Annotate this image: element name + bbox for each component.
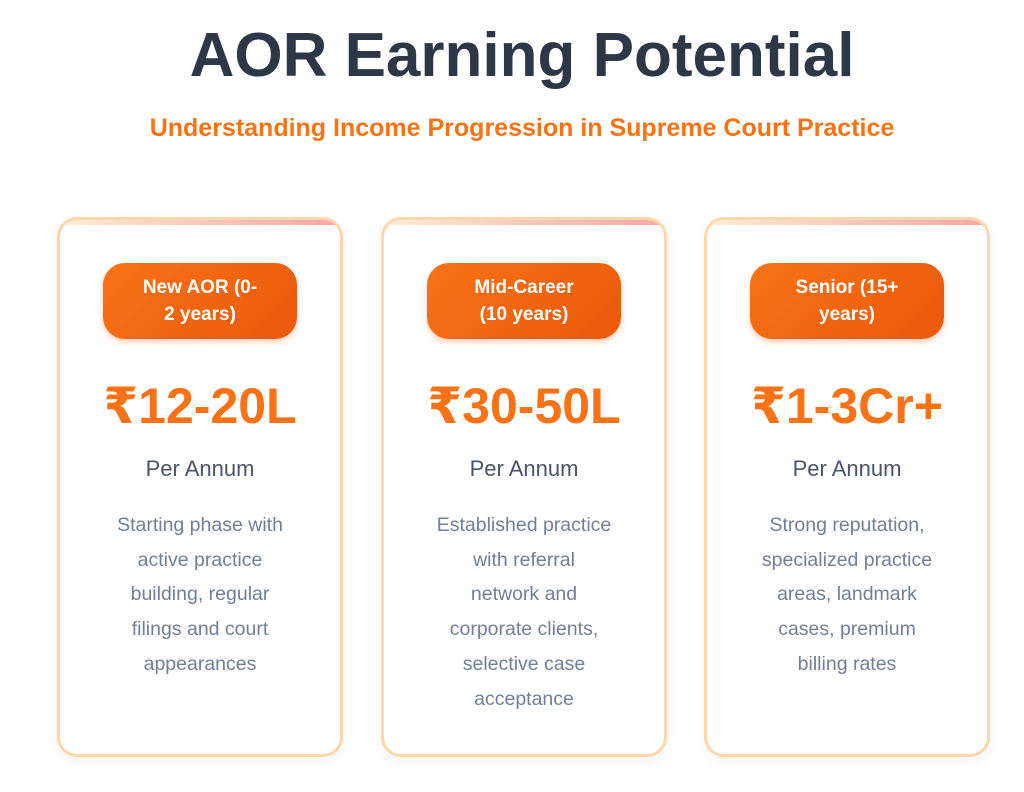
price: ₹30-50L	[427, 378, 621, 434]
panel: new AOR	[57, 217, 343, 757]
panel: senior	[704, 217, 990, 757]
badge: Mid-Career	[474, 277, 574, 298]
description: appearances	[144, 653, 256, 675]
price: ₹12-20L	[103, 378, 297, 434]
description: specialized practice	[762, 549, 932, 571]
description: cases, premium	[778, 618, 916, 640]
description	[117, 514, 283, 675]
badge: New AOR (0-	[143, 277, 257, 298]
description: Established practice	[437, 514, 611, 536]
price: ₹1-3Cr+	[751, 378, 943, 434]
badge: (10 years)	[480, 304, 568, 325]
description: filings and court	[132, 618, 268, 640]
per annum: Per Annum	[146, 456, 254, 481]
description	[762, 514, 932, 675]
description: building, regular	[131, 583, 269, 605]
badge	[103, 263, 297, 339]
badge	[427, 263, 621, 339]
subtitle: Understanding Income Progression in Supreme Court Practice	[150, 114, 894, 142]
description: acceptance	[474, 688, 574, 710]
description: areas, landmark	[777, 583, 917, 605]
description: Starting phase with	[117, 514, 283, 536]
description: with referral	[473, 549, 575, 571]
description: billing rates	[798, 653, 896, 675]
description: network and	[471, 583, 577, 605]
description: selective case	[463, 653, 585, 675]
description: Strong reputation,	[769, 514, 925, 536]
description	[437, 514, 611, 710]
title: AOR Earning Potential	[190, 21, 854, 90]
badge: Senior (15+	[796, 277, 898, 298]
description: active practice	[138, 549, 262, 571]
badge	[750, 263, 944, 339]
badge: years)	[819, 304, 875, 325]
per annum: Per Annum	[470, 456, 578, 481]
description: corporate clients,	[450, 618, 598, 640]
panel: mid-career	[381, 217, 667, 757]
per annum: Per Annum	[793, 456, 901, 481]
badge: 2 years)	[164, 304, 236, 325]
